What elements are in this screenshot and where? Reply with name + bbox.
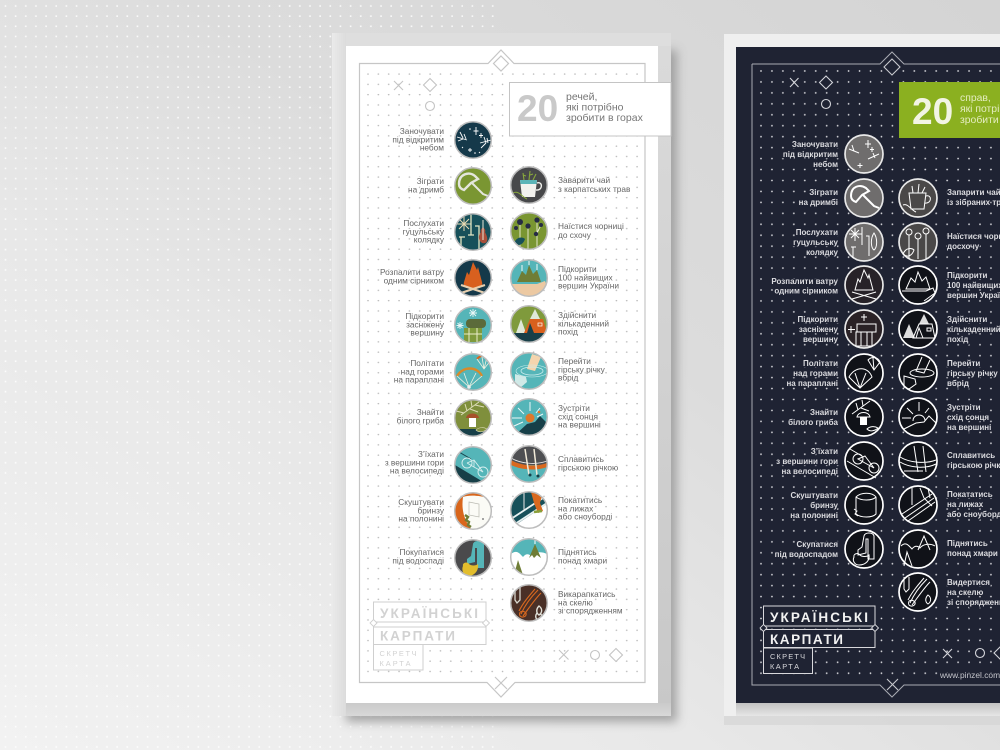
icon: tea cup — [511, 167, 547, 203]
dark left column labels: над горами — [793, 369, 838, 378]
item: long hike — [511, 306, 609, 342]
label: Політати — [410, 358, 444, 368]
item: cross the river — [511, 353, 606, 389]
icon: raft line — [899, 442, 937, 480]
dark right column labels: схід сонця — [947, 413, 989, 422]
decorative symbols: bottom — [559, 648, 622, 662]
dark left column labels: Знайти — [810, 408, 838, 417]
icon: tent — [511, 306, 547, 342]
callout: 20 tasks: 20 — [912, 91, 953, 132]
dark left column labels — [771, 140, 839, 559]
label: схід сонця — [558, 411, 598, 421]
logo: Ukrainian Carpathians: КАРТА — [380, 659, 411, 668]
label: вершин України — [558, 281, 619, 291]
item: rafting — [511, 446, 618, 482]
item: above the clouds — [511, 539, 608, 575]
decorative symbols: top — [394, 78, 436, 110]
dark left column labels: колядку — [806, 248, 839, 257]
callout: 20 things — [510, 82, 671, 136]
label: Покупатися — [400, 547, 444, 557]
item: climbing — [511, 585, 623, 621]
callout: 20 things: 20 — [517, 88, 558, 129]
dark left column labels: білого гриба — [788, 418, 839, 427]
label: на велосипеді — [390, 466, 444, 476]
label: колядку — [414, 235, 445, 245]
icon: mushroom — [455, 400, 491, 436]
logo: Ukrainian Carpathians: КАРПАТИ — [380, 628, 455, 644]
dark right column labels: Зустріти — [947, 403, 981, 412]
dark right column labels: на вершині — [947, 423, 991, 432]
dark right column labels — [947, 188, 1000, 607]
callout: 20 things: речей, — [566, 91, 597, 103]
callout: 20 things: які потрібно — [566, 102, 624, 114]
icon: raft — [511, 446, 547, 482]
item: snowy peak — [405, 307, 491, 343]
icon: peaks line — [899, 266, 937, 304]
icon: skis — [511, 492, 547, 528]
label: під відкритим — [392, 134, 444, 144]
dark right column labels: Покататись — [947, 490, 993, 499]
item: bonfire — [380, 260, 491, 296]
label: Перейти — [558, 356, 591, 366]
label: Підкорити — [558, 264, 597, 274]
frame top diamond — [884, 59, 900, 75]
decorative symbols: bottom — [943, 647, 1000, 659]
dark right column labels: похід — [947, 335, 968, 344]
dark left column labels: вершину — [803, 335, 839, 344]
dark left column labels: Заночувати — [792, 140, 838, 149]
item: 100 highest peaks — [511, 260, 619, 296]
logo: Ukrainian Carpathians: СКРЕТЧ — [380, 649, 417, 658]
label: похід — [558, 327, 578, 337]
icon: peaks above clouds — [511, 539, 547, 575]
logo: dark Ukrainian Carpathians: УКРАЇНСЬКІ — [770, 610, 868, 625]
dark right column labels: досхочу — [947, 242, 980, 251]
icon: rope and gear — [511, 585, 547, 621]
item: play the jew's harp — [408, 168, 491, 204]
label: на лижах — [558, 503, 594, 513]
icon: carol line — [845, 223, 883, 261]
item: blueberries — [511, 213, 624, 249]
label: або сноуборді — [558, 512, 612, 522]
icon: clouds line — [899, 530, 937, 568]
dark left column labels: гуцульську — [793, 238, 839, 247]
label: Наїстися чорниці — [558, 221, 624, 231]
label: гірською річкою — [558, 462, 618, 472]
icon: tea line — [899, 179, 937, 217]
label: над горами — [401, 366, 444, 376]
icon: mountains on a palm — [511, 260, 547, 296]
logo: Ukrainian Carpathians: УКРАЇНСЬКІ — [380, 606, 478, 621]
dark right column labels: Здійснити — [947, 315, 987, 324]
icon: bonfire line — [845, 266, 883, 304]
label: під водоспаді — [392, 556, 444, 566]
poster backing — [332, 33, 671, 716]
label: одним сірником — [384, 276, 444, 286]
dark right column labels: на скелю — [947, 588, 983, 597]
icon: jew's harp line — [845, 179, 883, 217]
poster cast shadow — [346, 50, 677, 722]
icon: tent line — [899, 310, 937, 348]
dark left column labels: на полонині — [790, 511, 838, 520]
poster sheet — [736, 47, 1000, 703]
dark left column labels: бринзу — [810, 501, 839, 510]
label: Розпалити ватру — [380, 267, 445, 277]
dark left column labels: засніжену — [799, 325, 839, 334]
dark right column labels: Сплавитись — [947, 451, 995, 460]
label: Сплавитись — [558, 454, 604, 464]
label: Підкорити — [405, 311, 444, 321]
label: на скелю — [558, 597, 593, 607]
frame bottom cross — [887, 679, 898, 690]
dark left column labels: Скупатися — [797, 540, 838, 549]
icon: mushroom line — [845, 398, 883, 436]
label: понад хмари — [558, 556, 608, 566]
callout: 20 tasks — [899, 82, 1000, 138]
frame — [752, 52, 1000, 697]
dark right column labels: понад хмари — [947, 549, 998, 558]
item: herbal tea — [511, 167, 631, 203]
icon: star, trembita and violin — [455, 214, 491, 250]
label: Здійснити — [558, 310, 596, 320]
callout: 20 tasks: зробити — [960, 114, 999, 126]
item: sleep under the sky — [392, 122, 491, 158]
logo: dark Ukrainian Carpathians: КАРТА — [770, 662, 799, 671]
poster plate — [724, 34, 1000, 716]
item: bryndza — [398, 493, 491, 529]
item: sunrise — [511, 399, 601, 435]
icon: sun over mountain — [511, 399, 547, 435]
dark left column labels: Підкорити — [798, 315, 838, 324]
label: вбрід — [558, 373, 579, 383]
icon: waterfall line — [845, 530, 883, 568]
label: Покатитись — [558, 495, 602, 505]
dark right column labels: кількаденний — [947, 325, 1000, 334]
logo: dark Ukrainian Carpathians — [760, 606, 878, 674]
icon: blueberries line — [899, 223, 937, 261]
label: гірську річку — [558, 364, 606, 374]
icon: backpack line — [845, 310, 883, 348]
item: paragliding — [394, 354, 491, 390]
label: З’їхати — [418, 449, 444, 459]
icon: blueberries — [511, 213, 547, 249]
label: на полонині — [398, 514, 444, 524]
icon: jew's harp — [455, 168, 491, 204]
dark left column labels: Політати — [803, 359, 838, 368]
dark left column labels: Зіграти — [809, 188, 838, 197]
dark right column labels: гірську річку — [947, 369, 998, 378]
callout: 20 things: зробити в горах — [566, 112, 644, 124]
label: вершину — [410, 328, 445, 338]
dot grid — [363, 69, 642, 678]
label: 100 найвищих — [558, 272, 613, 282]
frame bottom cross — [495, 677, 507, 689]
label: на параплані — [394, 375, 444, 385]
label: на вершині — [558, 420, 601, 430]
dark right column labels: Перейти — [947, 359, 980, 368]
item: hutsul carol — [403, 214, 491, 250]
item: skiing — [511, 492, 612, 528]
icon: cheese — [455, 493, 491, 529]
label: з вершини гори — [385, 457, 444, 467]
icon: paraglider line — [845, 354, 883, 392]
icon: bonfire — [455, 260, 491, 296]
dark right column labels: на лижах — [947, 500, 984, 509]
logo: dark Ukrainian Carpathians: КАРПАТИ — [770, 632, 843, 647]
label: гуцульську — [403, 226, 445, 236]
dark left column labels: під відкритим — [783, 150, 838, 159]
label: бринзу — [418, 505, 445, 515]
panel: dark poster — [724, 34, 1000, 725]
frame top diamond — [494, 56, 508, 71]
icon: bicycle — [455, 447, 491, 483]
callout: 20 tasks: справ, — [960, 93, 991, 104]
label: Піднятись — [558, 547, 597, 557]
dark left column labels: з вершини гори — [776, 457, 838, 466]
dark left column labels: на велосипеді — [782, 467, 838, 476]
poster sheet — [346, 46, 658, 703]
label: Знайти — [417, 407, 444, 417]
label: кількаденний — [558, 318, 609, 328]
dark left column labels: З’їхати — [811, 447, 838, 456]
plate shadow — [736, 703, 1000, 716]
dark right column labels: Підкорити — [947, 271, 988, 280]
dark right column labels: Запарити чай — [947, 188, 1000, 197]
dark left column labels: на дримбі — [799, 198, 838, 207]
label: Заночувати — [400, 126, 444, 136]
dark left column labels: Скуштувати — [790, 491, 838, 500]
dark right column labels: Піднятись — [947, 539, 988, 548]
dark right column labels: вбрід — [947, 379, 969, 388]
icon: bicycle line — [845, 442, 883, 480]
label: Послухати — [403, 218, 444, 228]
label: Зустріти — [558, 403, 590, 413]
dark left column labels: Розпалити ватру — [771, 277, 839, 286]
dark left column labels: Послухати — [796, 228, 838, 237]
label: до схочу — [558, 230, 592, 240]
label: Заварити чай — [558, 175, 610, 185]
label: Викарапкатись — [558, 589, 615, 599]
plate lower shadow — [724, 716, 1000, 725]
panel: white poster — [332, 33, 677, 722]
dot grid — [756, 66, 1000, 676]
label: з карпатських трав — [558, 184, 631, 194]
icon: wading foot — [511, 353, 548, 389]
label: небом — [420, 143, 444, 153]
icon: backpack and snowflakes — [455, 307, 491, 343]
logo: dark Ukrainian Carpathians: СКРЕТЧ — [770, 652, 805, 661]
dark left column labels: небом — [813, 160, 838, 169]
dark left column labels: одним сірником — [774, 286, 838, 296]
icon: night sky line — [845, 135, 883, 173]
label: засніжену — [406, 319, 445, 329]
icon: night sky — [455, 122, 491, 158]
logo: Ukrainian Carpathians — [370, 602, 490, 670]
dark left column labels: під водоспадом — [775, 550, 838, 559]
item: white mushroom — [397, 400, 491, 436]
item: cycling down — [385, 447, 491, 483]
label: білого гриба — [397, 416, 444, 426]
icon: waterfall and duck — [455, 540, 491, 576]
icon: cheese line — [845, 486, 883, 524]
icon: ski line — [899, 486, 937, 524]
dark left column labels: на параплані — [786, 379, 838, 388]
label: Скуштувати — [398, 497, 444, 507]
icon: paragliders — [455, 354, 491, 390]
decorative symbols: top — [790, 76, 832, 108]
frame — [360, 50, 645, 697]
label: зі спорядженням — [558, 606, 623, 616]
label: Зіграти — [417, 176, 444, 186]
icon: wading line — [899, 354, 937, 392]
icon: sunrise line — [899, 398, 937, 436]
label: на дримб — [408, 184, 444, 194]
item: waterfall — [392, 540, 491, 576]
icon: climbing line — [899, 573, 937, 611]
dark right column labels: Видертися — [947, 578, 990, 587]
dark left column icons — [845, 135, 937, 611]
